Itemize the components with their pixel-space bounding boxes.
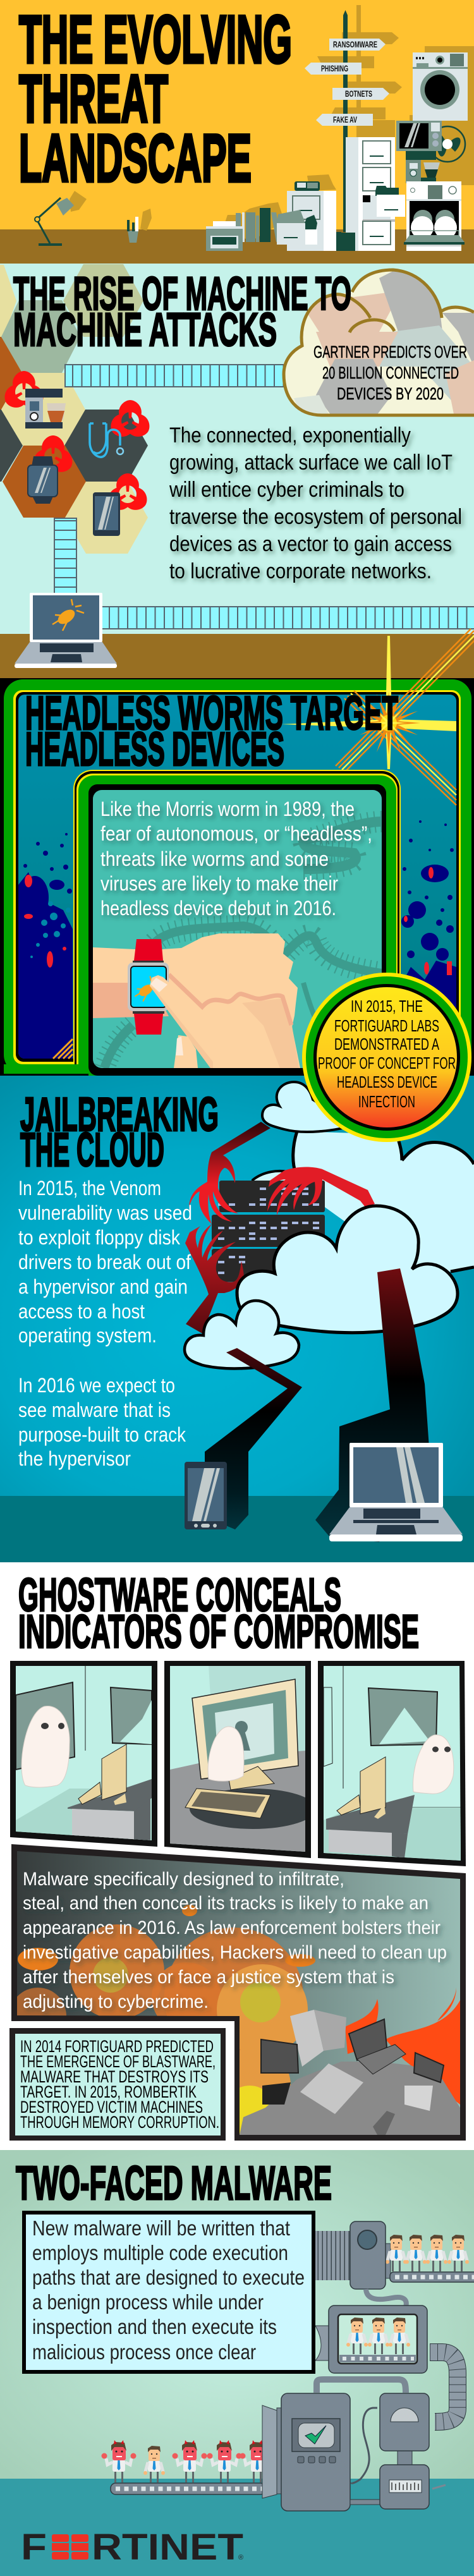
- section background: yellow header: [0, 0, 474, 229]
- starburst explosion: [281, 629, 474, 805]
- machine: middle monitor module: [315, 2306, 427, 2373]
- brown floor: section two: [0, 634, 474, 678]
- machine: top arch pipe: [317, 2379, 406, 2393]
- icon: washing machine: [413, 52, 468, 121]
- illustration: back cloud: [253, 1131, 474, 1273]
- body text: ghostware: [23, 1869, 447, 2012]
- logo: Fortinet: RTINET: [92, 2527, 243, 2568]
- teal specks over navy: [30, 901, 71, 958]
- callout text: [20, 2037, 219, 2132]
- body text: connected attack surface: will entice cyber criminals to: [169, 478, 404, 502]
- logo: Fortinet: [21, 2527, 243, 2568]
- body text: ghostware: Malware specifically designed to infiltrate,: [23, 1869, 344, 1890]
- body text: venom vulnerability: [18, 1177, 192, 1347]
- callout text: DESTROYED VICTIM MACHINES: [20, 2098, 203, 2117]
- icon: tall filing cabinet: [346, 137, 405, 251]
- icon: desk fan: [430, 126, 465, 162]
- network tube: top: [65, 365, 286, 387]
- title: The Evolving Threat Landscape: LANDSCAPE: [19, 120, 252, 196]
- callout text: IN 2015, THE: [351, 997, 423, 1016]
- icon: green folder at cabinet base: [336, 232, 355, 251]
- illustration: red claw upper right: [267, 1167, 375, 1215]
- illustration: red claw upper left: [189, 1122, 270, 1224]
- body text: headless devices: Like the Morris worm in 1989, the: [100, 798, 355, 820]
- icon: infected laptop: [15, 593, 117, 668]
- panel: ghostware body with explosion: [9, 1844, 466, 2141]
- callout text: THE EMERGENCE OF BLASTWARE,: [20, 2052, 216, 2071]
- title: The Evolving Threat Landscape: [19, 1, 292, 196]
- decorative hexagon honeycomb: [0, 264, 148, 554]
- machine: connecting hose: [366, 2289, 406, 2307]
- icon: biohazard smartphone: [93, 473, 152, 536]
- body text: venom vulnerability: operating system.: [18, 1324, 157, 1347]
- workers on top conveyor: [386, 2235, 469, 2271]
- sign and appliance shadows: [70, 5, 474, 240]
- section background: jailbreaking the cloud: [0, 1076, 474, 1496]
- heading: rise of machine to machine attacks: [13, 267, 351, 356]
- icon: coffee maker: [406, 151, 440, 183]
- body text: malware to crack the hypervisor: the hypervisor: [18, 1447, 131, 1470]
- icon: books: [236, 208, 281, 242]
- illustration: worms in teal panel: [104, 822, 382, 1068]
- callout text: TARGET. IN 2015, ROMBERTIK: [20, 2082, 197, 2101]
- panel: green outer frame: [4, 679, 471, 1074]
- heading: ghostware: [18, 1569, 419, 1658]
- icon: laptop: [329, 1443, 463, 1541]
- blue panel splatter: [18, 820, 456, 1059]
- section floor: teal: [0, 2479, 474, 2576]
- sign: ransomware: [329, 39, 386, 51]
- box text: malicious process once clear: [32, 2340, 256, 2364]
- body text: ghostware: steal, and then conceal its tracks is likely to make an: [23, 1893, 428, 1914]
- icon: desk lamp: [35, 198, 74, 246]
- body text: ghostware: after themselves or face a justice system that is: [23, 1967, 394, 1988]
- section background: machine to machine: [0, 264, 474, 634]
- callout text: IN 2014 FORTIGUARD PREDICTED: [20, 2037, 214, 2056]
- body text: headless devices: headless device debut in 2016.: [100, 897, 336, 920]
- body text: headless devices: fear of autonomous, or “headless”,: [100, 822, 372, 845]
- icon: biohazard coffee maker: [0, 371, 66, 428]
- comic panel 3: ghost leaving: [318, 1661, 466, 1866]
- logo: Fortinet: F: [21, 2527, 47, 2568]
- icon: smartphone: [185, 1462, 227, 1529]
- body text: connected attack surface: The connected, exponentially: [169, 423, 411, 447]
- box text: inspection and then execute its: [32, 2315, 277, 2338]
- illustration: low cloud: [185, 1301, 299, 1368]
- body text: venom vulnerability: to exploit floppy disk: [18, 1226, 181, 1249]
- title: The Evolving Threat Landscape: THREAT: [19, 61, 168, 137]
- section floor: teal: [0, 1496, 474, 1562]
- body text: headless devices: [100, 798, 372, 920]
- section background: ghostware: [0, 1562, 474, 2151]
- body text: connected attack surface: [169, 423, 462, 583]
- illustration: dark tentacle to laptop: [315, 1268, 429, 1542]
- illustration: middle cloud: [237, 1206, 458, 1333]
- icon: low filing cabinet: [287, 181, 336, 251]
- body text: malware to crack the hypervisor: see malware that is: [18, 1399, 171, 1421]
- explosion cloud: [9, 1905, 315, 2136]
- sign: botnets: BOTNETS: [345, 88, 372, 99]
- body text: venom vulnerability: In 2015, the Venom: [18, 1177, 161, 1200]
- cloud text: [313, 343, 467, 403]
- icon: red smartwatch: [128, 939, 169, 1035]
- sign: fake av: [316, 114, 373, 126]
- icon: biohazard stethoscope: [90, 400, 154, 457]
- sign: botnets: [332, 88, 389, 100]
- section floor: brown desk: [0, 229, 474, 264]
- sign: phishing: PHISHING: [321, 63, 348, 73]
- red splatter blobs: [24, 867, 452, 975]
- icon: radio on cabinet: [295, 181, 320, 191]
- illustration: top-left cloud: [262, 1082, 354, 1132]
- illustration: red claw lower: [185, 1224, 244, 1334]
- body text: venom vulnerability: a hypervisor and gain: [18, 1275, 188, 1298]
- fire: [345, 1988, 460, 2105]
- icon: biohazard smartwatch: [28, 435, 77, 504]
- callout circle: FortiGuard Labs proof of concept: [302, 973, 471, 1142]
- comic panel 2: ghost at monitor: [164, 1661, 316, 1858]
- illustration: hand with smartwatch: [93, 933, 300, 1068]
- box text: [32, 2216, 305, 2364]
- network tube: vertical: [54, 518, 76, 593]
- illustration: server rack: [212, 1181, 325, 1282]
- panel: central window frame: [0, 770, 401, 1086]
- body text: connected attack surface: to lucrative corporate networks.: [169, 559, 432, 583]
- box text: paths that are designed to execute: [32, 2266, 305, 2289]
- icon: dishwasher: [404, 181, 465, 251]
- section background: two-faced malware: [0, 2150, 474, 2479]
- section background: black frame: [0, 678, 474, 1076]
- callout text: [318, 997, 456, 1111]
- network tube: bottom: [101, 607, 474, 629]
- sign: fake av: FAKE AV: [333, 114, 357, 125]
- machine: top bellows and scanner: [315, 2221, 474, 2289]
- body text: venom vulnerability: access to a host: [18, 1300, 145, 1323]
- conveyor top: [390, 2272, 474, 2282]
- cloud patchwork: [286, 272, 474, 413]
- body text: malware to crack the hypervisor: purpose-built to crack: [18, 1423, 186, 1446]
- box text: a benign process while under: [32, 2290, 264, 2314]
- box text: employs multiple code execution: [32, 2241, 288, 2264]
- body text: ghostware: adjusting to cybercrime.: [23, 1991, 209, 2012]
- illustration: dark tentacle to phone: [205, 1348, 302, 1529]
- comic panel 1: ghost by window: [10, 1661, 157, 1847]
- logo: Fortinet: ®: [238, 2554, 243, 2561]
- text box: two-faced malware: [24, 2213, 313, 2372]
- cloud callout: Gartner prediction: [278, 265, 474, 420]
- body text: malware to crack the hypervisor: [18, 1374, 186, 1470]
- callout text: INFECTION: [358, 1092, 415, 1111]
- body text: ghostware: investigative capabilities, Hackers will need to clean up: [23, 1942, 447, 1963]
- heading: jailbreaking the cloud: [20, 1088, 219, 1176]
- icon: pencil cup: [127, 217, 138, 243]
- callout: blastware: [9, 2028, 226, 2141]
- box text: New malware will be written that: [32, 2216, 290, 2240]
- bottom-left stripes: [53, 1039, 73, 1059]
- icon: green check mark: [305, 2426, 326, 2444]
- callout text: MALWARE THAT DESTROYS ITS: [20, 2067, 209, 2086]
- icon: microwave: [396, 121, 442, 151]
- body text: headless devices: threats like worms and some: [100, 848, 329, 870]
- machine: ribbed duct: [430, 2352, 458, 2422]
- heading: rise of machine to machine attacks: MACHINE ATTACKS: [13, 303, 277, 356]
- icon: file box: [277, 210, 317, 245]
- workers: infected devils on conveyor: [101, 2440, 274, 2482]
- machine: main inspection box: [262, 2393, 350, 2511]
- junk heap: [240, 2010, 460, 2135]
- body text: venom vulnerability: vulnerability was used: [18, 1201, 192, 1224]
- sign: phishing: [305, 63, 362, 75]
- body text: ghostware: appearance in 2016. As law enforcement bolsters their: [23, 1917, 441, 1938]
- machine: gauge and meter boxes: [350, 2393, 446, 2509]
- body text: venom vulnerability: drivers to break out of: [18, 1251, 191, 1273]
- heading: jailbreaking the cloud: JAILBREAKING: [20, 1088, 219, 1141]
- sign: ransomware: RANSOMWARE: [333, 39, 377, 49]
- icon: typewriter: [206, 221, 243, 251]
- body text: headless devices: viruses are likely to make their: [100, 872, 338, 895]
- callout text: THROUGH MEMORY CORRUPTION.: [20, 2113, 219, 2132]
- signpost with threat labels: [305, 10, 389, 232]
- heading: headless worms: [25, 686, 398, 775]
- machine: bottom conveyor: [111, 2483, 265, 2494]
- body text: malware to crack the hypervisor: In 2016 we expect to: [18, 1374, 175, 1397]
- heading: jailbreaking the cloud: THE CLOUD: [20, 1123, 164, 1176]
